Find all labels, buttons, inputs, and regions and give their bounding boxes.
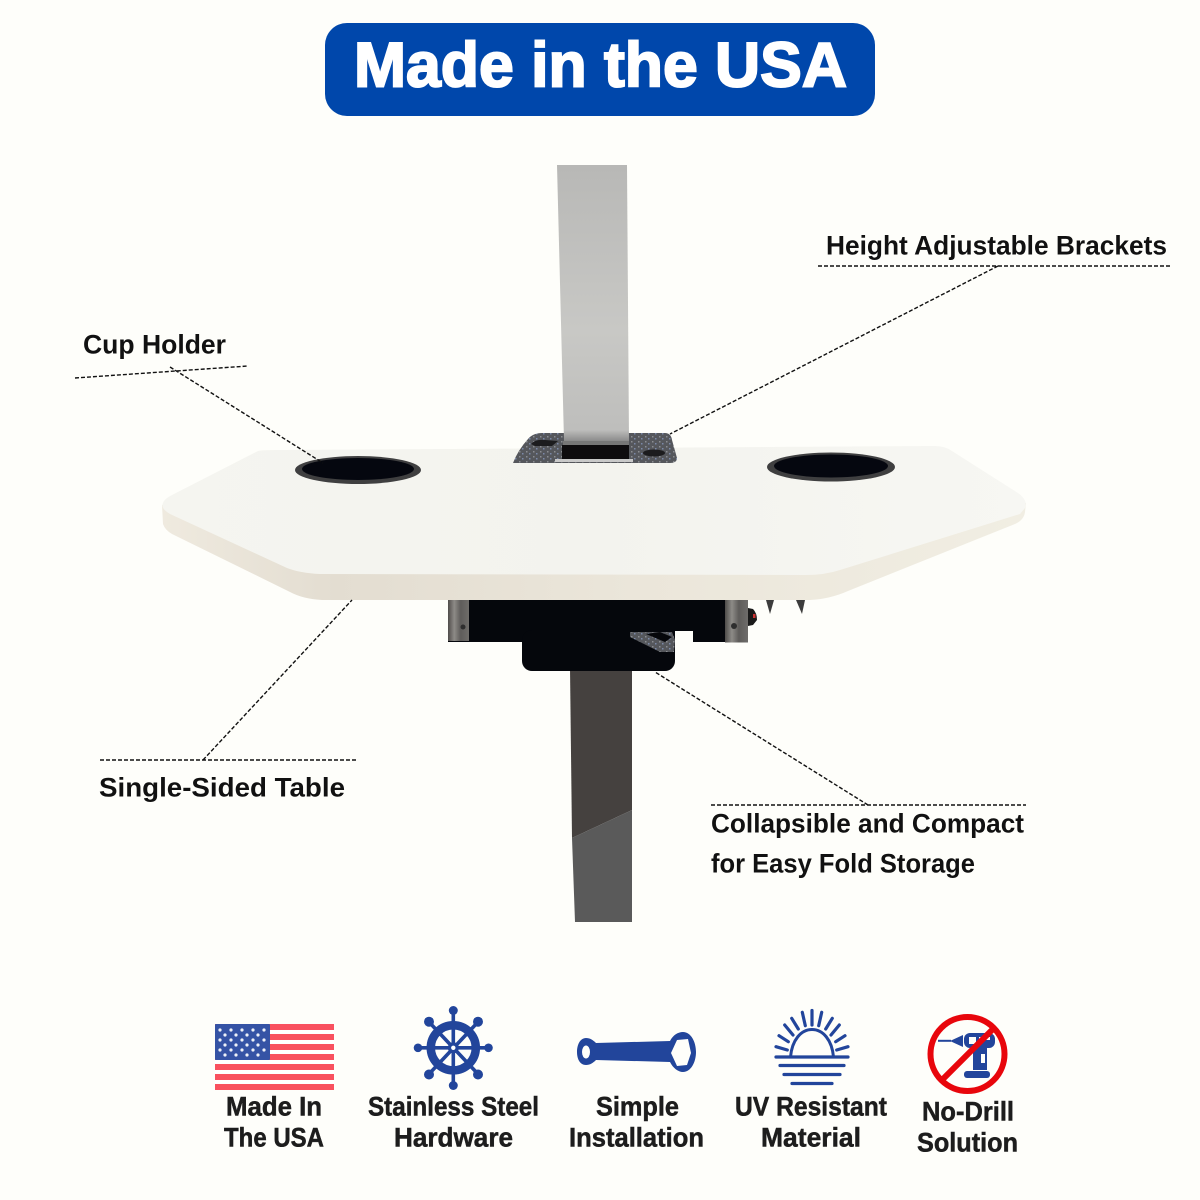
label: no-drill solution — [917, 1096, 1018, 1158]
product photo: folding table — [162, 165, 1026, 922]
callout: height adjustable brackets: Height Adjustable Brackets — [826, 230, 1167, 260]
callout: collapsible and compact: Collapsible and Compact — [711, 808, 1024, 838]
label: stainless steel hardware — [368, 1092, 539, 1152]
label: no-drill solution: Solution — [917, 1128, 1018, 1158]
icon: sun over water — [776, 1010, 848, 1084]
label: UV resistant material: Material — [761, 1122, 861, 1152]
label: no-drill solution: No-Drill — [922, 1096, 1014, 1126]
label: UV resistant material: UV Resistant — [735, 1092, 887, 1122]
callout: cup holder: Cup Holder — [83, 330, 226, 360]
feature: UV resistant material — [735, 1010, 887, 1152]
title text: Made in the USA — [354, 30, 847, 100]
upper post — [557, 165, 629, 441]
callout: height adjustable brackets — [670, 230, 1172, 434]
under-table bracket — [448, 600, 805, 671]
label: UV resistant material — [735, 1092, 887, 1152]
label: made in the USA — [224, 1092, 324, 1152]
label: simple installation — [569, 1092, 704, 1152]
icon: wrench — [577, 1032, 696, 1072]
icon: crossed-out drill — [930, 1017, 1004, 1091]
callout: single-sided table — [99, 600, 356, 802]
right cup holder — [767, 452, 895, 482]
table side edge — [162, 503, 1026, 600]
feature: stainless steel hardware — [368, 1006, 539, 1152]
label: stainless steel hardware: Stainless Steel — [368, 1092, 539, 1122]
feature: made in the USA — [215, 1024, 334, 1152]
icon: US flag — [215, 1024, 334, 1090]
feature: simple installation — [569, 1032, 704, 1152]
post sleeve — [562, 441, 629, 459]
callout: single-sided table: Single-Sided Table — [99, 772, 345, 802]
mounting plate — [513, 433, 677, 463]
label: simple installation: Installation — [569, 1122, 704, 1152]
lower post — [570, 668, 632, 922]
label: simple installation: Simple — [596, 1092, 679, 1122]
feature: no-drill solution — [917, 1017, 1018, 1158]
label: made in the USA: Made In — [226, 1092, 322, 1122]
label: stainless steel hardware: Hardware — [394, 1122, 513, 1152]
icon: ship wheel — [414, 1006, 493, 1090]
callout: collapsible and compact — [655, 672, 1026, 878]
callout: collapsible and compact: for Easy Fold Storage — [711, 848, 975, 878]
table top — [162, 446, 1026, 575]
callout: cup holder — [75, 330, 323, 463]
label: made in the USA: The USA — [224, 1122, 324, 1152]
title banner — [325, 23, 875, 116]
left cup holder — [295, 456, 421, 484]
